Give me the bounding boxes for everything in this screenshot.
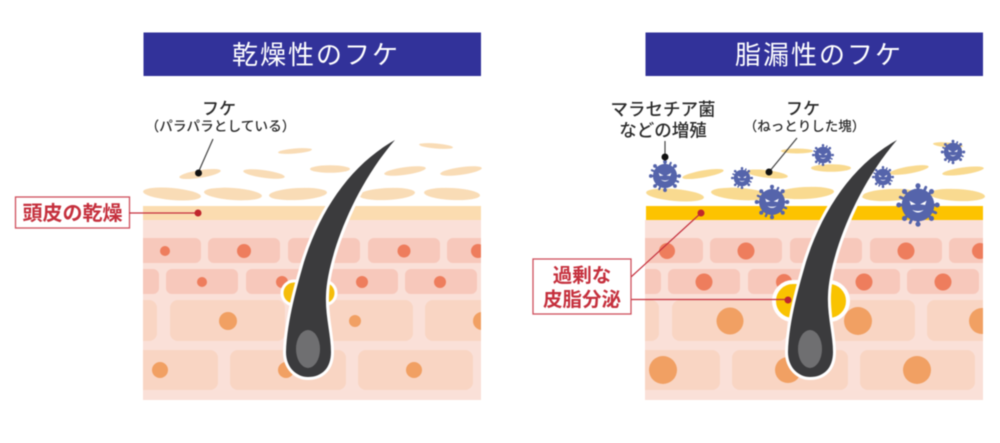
callout: excess sebum: 皮脂分泌	[543, 289, 621, 311]
panel: seborrheic dandruff	[533, 32, 1000, 400]
label: dandruff clump: フケ	[786, 100, 820, 118]
viruses: malassezia	[649, 140, 965, 227]
callout: excess sebum: 過剰な	[553, 265, 611, 287]
skin cells: dry scalp	[142, 220, 482, 400]
label: dandruff clump	[744, 100, 865, 134]
title bar: seborrheic dandruff: 脂漏性のフケ	[735, 40, 903, 70]
title bar: dry dandruff: 乾燥性のフケ	[232, 40, 400, 70]
callout: dry scalp: 頭皮の乾燥	[22, 202, 122, 225]
hair: oily scalp	[788, 140, 897, 377]
title bar: seborrheic dandruff	[646, 32, 983, 76]
skin cells: oily scalp	[644, 220, 984, 400]
dry scalp band	[143, 206, 481, 220]
leader: dandruff clump	[766, 138, 797, 176]
leader: dandruff	[195, 139, 213, 176]
title bar: dry dandruff	[144, 32, 481, 76]
label: dandruff: フケ	[202, 100, 236, 118]
oily scalp band	[646, 206, 983, 220]
leader: malassezia	[662, 141, 668, 160]
callout: excess sebum	[533, 210, 792, 314]
hair: dry scalp	[286, 140, 395, 377]
label: dandruff clump: （ねっとりした塊）	[744, 119, 865, 134]
panel: dry dandruff	[16, 32, 515, 400]
label: malassezia growth: マラセチア菌	[610, 100, 716, 120]
flakes: oily scalp	[646, 141, 985, 204]
sebum gland: enlarged	[774, 282, 848, 320]
label: dandruff: （パラパラとしている）	[145, 119, 296, 134]
label: malassezia growth: などの増殖	[619, 120, 707, 140]
callout: dry scalp	[16, 197, 202, 228]
label: malassezia growth	[610, 100, 716, 140]
label: dandruff	[145, 100, 296, 134]
flakes: dry scalp	[143, 142, 482, 203]
sebum gland: small	[282, 281, 336, 305]
